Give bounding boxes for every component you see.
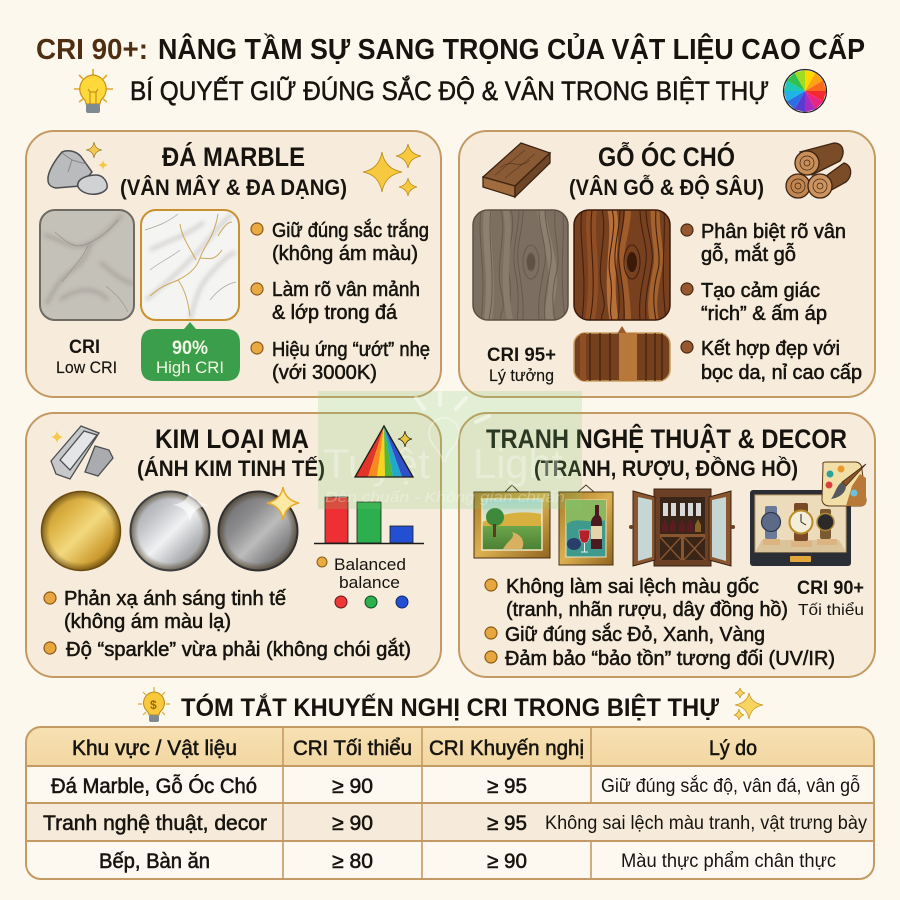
table row: kitchen and dining: Bếp, Bàn ăn — [99, 850, 210, 873]
swatch: high CRI marble — [141, 210, 239, 320]
label: CRI 90+ minimum: CRI 90+ — [797, 578, 864, 599]
icon: summary sparkles — [734, 688, 763, 720]
table row: kitchen and dining: ≥ 80 — [332, 850, 373, 873]
label: low CRI: CRI — [69, 337, 100, 358]
badge: 90% high CRI: High CRI — [156, 358, 224, 377]
icon: wine painting — [559, 485, 613, 565]
bullets: marble: Làm rõ vân mảnh — [272, 279, 420, 301]
icon: palette and brush — [822, 462, 866, 506]
icon: logs — [786, 143, 851, 198]
bullets: marble: (với 3000K) — [272, 362, 377, 384]
table row: art and decor: ≥ 90 — [332, 812, 373, 835]
metal disc: steel — [218, 487, 299, 570]
panel: Tranh nghệ thuật & decor — [459, 413, 875, 677]
label: CRI 90+ minimum — [797, 578, 864, 619]
icon: light bulb — [74, 69, 113, 113]
table row: kitchen and dining: Màu thực phẩm chân thực — [621, 851, 836, 872]
section heading: summary: TÓM TẮT KHUYẾN NGHỊ CRI TRONG BIỆT THỰ — [181, 692, 719, 722]
subheading: ánh kim: (ÁNH KIM TINH TẾ) — [137, 456, 325, 481]
bullets: marble: & lớp trong đá — [272, 302, 398, 324]
icon: rocks with sparkles — [48, 142, 108, 194]
bullets: art — [485, 576, 835, 670]
icon: watch display box — [750, 490, 851, 566]
table row: kitchen and dining — [99, 850, 836, 873]
icon: gold sparkles — [363, 144, 421, 196]
table header row: CRI Tối thiểu — [293, 737, 412, 760]
table header row: Khu vực / Vật liệu — [72, 737, 237, 760]
bullets: walnut: “rich” & ấm áp — [701, 303, 827, 325]
swatch: low CRI marble — [40, 210, 134, 320]
panel: Gỗ Óc Chó — [459, 131, 875, 397]
label: CRI 95+ ideal: Lý tưởng — [489, 366, 554, 385]
heading: Kim Loại Mạ: KIM LOẠI MẠ — [155, 424, 309, 454]
icon: metal ingots — [51, 426, 113, 479]
bullets: walnut: Tạo cảm giác — [701, 280, 820, 302]
table: CRI summary — [26, 727, 874, 879]
bullets: art: Đảm bảo “bảo tồn” tương đối (UV/IR) — [505, 648, 835, 670]
bullets: marble: Giữ đúng sắc trắng — [272, 219, 429, 242]
legend: balanced balance — [317, 555, 408, 608]
watermark: Đèn chuẩn - Không gian chuẩn — [325, 489, 565, 506]
panel: Đá Marble — [26, 131, 441, 397]
table row: marble and walnut: ≥ 90 — [332, 775, 373, 798]
table header row: Lý do — [709, 737, 757, 760]
icon: walnut plank — [483, 143, 550, 197]
bullets: art: Không làm sai lệch màu gốc — [506, 576, 759, 598]
watermark: Tuyệt — [323, 440, 430, 487]
table header row — [72, 737, 757, 760]
icon: landscape painting — [474, 485, 550, 558]
icon: dollar bulb — [138, 687, 170, 722]
subheading: vân gỗ: (VÂN GỖ & ĐỘ SÂU) — [569, 174, 764, 200]
panel: Kim Loại Mạ — [26, 413, 441, 677]
table row: art and decor — [43, 812, 867, 835]
bullets: marble: (không ám màu) — [272, 243, 418, 265]
bullets: art: Giữ đúng sắc Đỏ, Xanh, Vàng — [505, 623, 765, 646]
heading: Gỗ Óc Chó: GỖ ÓC CHÓ — [598, 141, 735, 172]
bullets: walnut — [681, 221, 862, 384]
bar chart: RGB balance — [314, 497, 424, 544]
metal disc: gold — [42, 492, 120, 570]
heading: Đá Marble: ĐÁ MARBLE — [162, 141, 305, 172]
legend: balanced balance: Balanced — [334, 555, 406, 574]
table row: marble and walnut: Đá Marble, Gỗ Óc Chó — [51, 775, 257, 798]
subheading: tranh, rượu, đồng hồ: (TRANH, RƯỢU, ĐỒNG HỒ) — [534, 456, 798, 481]
bullets: art: (tranh, nhãn rượu, dây đồng hồ) — [506, 599, 788, 621]
label: low CRI — [56, 337, 117, 377]
subtitle: BÍ QUYẾT GIỮ ĐÚNG SẮC ĐỘ & VÂN TRONG BIỆT THỰ — [130, 75, 769, 106]
label: CRI 95+ ideal: CRI 95+ — [487, 345, 556, 366]
table row: marble and walnut — [51, 775, 860, 798]
bullets: metal: Độ “sparkle” vừa phải (không chói gắt) — [66, 638, 411, 661]
heading: Tranh nghệ thuật: TRANH NGHỆ THUẬT & DECOR — [486, 423, 847, 454]
swatch: high CRI walnut — [574, 210, 670, 320]
swatch: low CRI walnut — [473, 210, 568, 320]
label: CRI 95+ ideal — [487, 345, 556, 385]
label: CRI 90+ minimum: Tối thiểu — [798, 601, 864, 619]
icon: rainbow prism — [355, 426, 413, 477]
bullets: metal: Phản xạ ánh sáng tinh tế — [64, 588, 286, 610]
table row: marble and walnut: ≥ 95 — [487, 775, 527, 798]
table row: art and decor: Không sai lệch màu tranh, vật trưng bày — [545, 813, 867, 834]
badge: 90% high CRI — [141, 322, 240, 381]
bullets: walnut: Kết hợp đẹp với — [701, 338, 840, 360]
subheading: vân mây: (VÂN MÂY & ĐA DẠNG) — [120, 175, 347, 200]
icon: wine cabinet — [629, 489, 735, 566]
metal disc: silver — [130, 488, 210, 570]
table row: art and decor: Tranh nghệ thuật, decor — [43, 812, 267, 835]
title: NÂNG TẦM SỰ SANG TRỌNG CỦA VẬT LIỆU CAO CẤP — [158, 32, 865, 66]
watermark: Light — [473, 440, 563, 487]
bullets: walnut: gỗ, mắt gỗ — [701, 243, 796, 266]
bullets: marble — [251, 219, 430, 384]
table row: art and decor: ≥ 95 — [487, 812, 527, 835]
bullets: walnut: bọc da, nỉ cao cấp — [701, 362, 862, 384]
table row: kitchen and dining: ≥ 90 — [487, 850, 527, 873]
bullets: metal — [44, 588, 411, 661]
title: CRI 90+: — [36, 34, 148, 66]
badge: wood sample — [574, 326, 670, 381]
bullets: walnut: Phân biệt rõ vân — [701, 221, 846, 243]
icon: dollar bulb: $ — [150, 698, 157, 712]
table row: marble and walnut: Giữ đúng sắc độ, vân đá, vân gỗ — [601, 775, 860, 797]
badge: 90% high CRI: 90% — [172, 338, 208, 359]
table header row: CRI Khuyến nghị — [429, 737, 584, 760]
legend: balanced balance: balance — [339, 573, 400, 592]
icon: colour wheel — [784, 70, 826, 112]
bullets: marble: Hiệu ứng “ướt” nhẹ — [272, 339, 430, 361]
bullets: metal: (không ám màu lạ) — [64, 611, 231, 633]
label: low CRI: Low CRI — [56, 358, 117, 377]
watermark — [318, 391, 582, 509]
